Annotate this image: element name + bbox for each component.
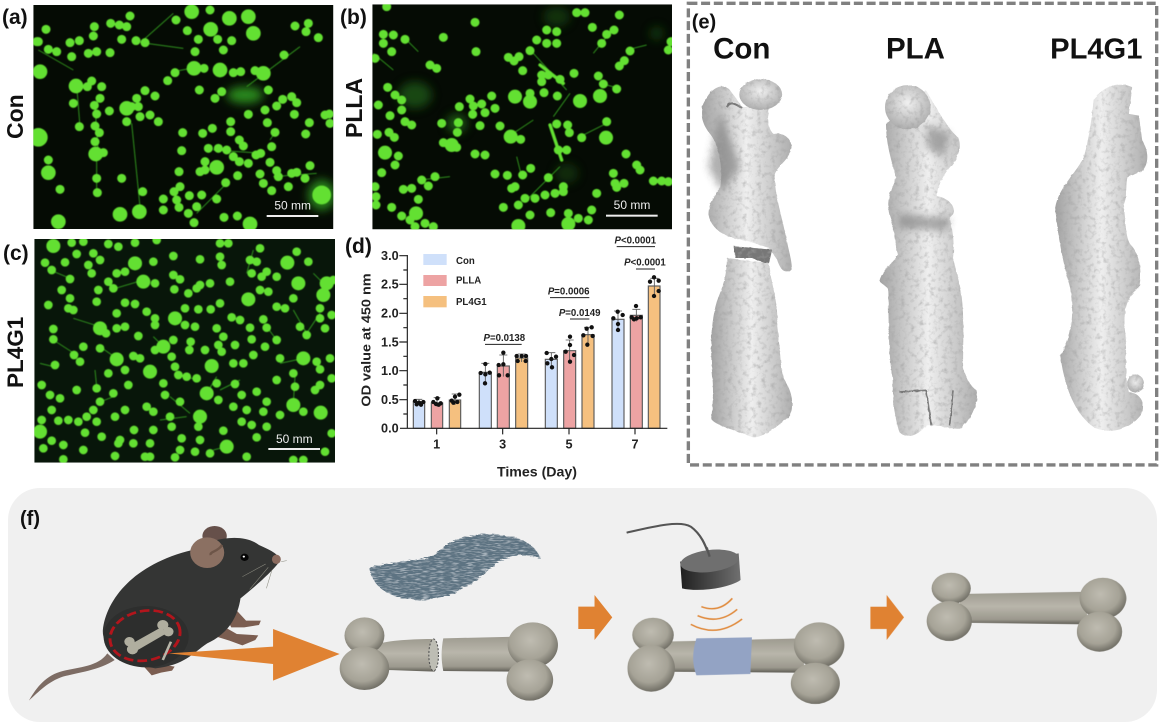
panel label d: (d)	[345, 235, 372, 258]
small femur in mouse	[124, 620, 174, 654]
orange arrow 2	[870, 595, 904, 640]
panel f: treatment schematic	[8, 488, 1157, 722]
y axis tick labels: 2.5	[381, 278, 399, 292]
fractured femur	[340, 617, 558, 701]
mouse back ear	[202, 526, 227, 546]
mouse haunch shading	[104, 606, 189, 667]
significance annotations: P<0.0001	[615, 235, 657, 246]
dashed frame	[688, 3, 1157, 465]
legend: PL4G1	[456, 297, 487, 308]
mouse eye	[240, 554, 249, 561]
y axis tick labels: 1.5	[381, 335, 399, 349]
heading Con: Con	[713, 33, 770, 66]
scale bar b	[606, 200, 658, 217]
panel b: PLLA fluorescence micrograph	[372, 4, 672, 229]
row label PL4G1: PL4G1	[3, 317, 28, 388]
data points	[415, 277, 659, 405]
y axis title: OD value at 450 nm	[359, 273, 373, 407]
mouse body	[103, 538, 280, 668]
panel label b: (b)	[340, 6, 367, 29]
panel c: PL4G1 fluorescence micrograph	[34, 239, 335, 463]
y axis tick labels	[381, 249, 399, 436]
bar chart d: OD value at 450 nm	[359, 235, 667, 480]
implant site ring	[104, 604, 186, 668]
femur: PL4G1	[1055, 84, 1147, 431]
scale bar a	[266, 201, 318, 217]
heading PLA: PLA	[886, 33, 945, 66]
mouse nose	[272, 555, 281, 564]
panel e: micro-CT femurs	[688, 3, 1157, 465]
significance annotations: P<0.0001	[624, 258, 666, 269]
panel label f: (f)	[20, 508, 40, 530]
mouse, implant and first arrow	[29, 526, 558, 701]
scale bar b: 50 mm	[614, 198, 650, 212]
healed femur	[927, 573, 1126, 652]
x axis tick labels	[433, 438, 639, 452]
axes	[399, 255, 667, 434]
x axis tick labels: 7	[631, 438, 639, 452]
x axis tick labels: 1	[433, 438, 440, 452]
ultrasound stage and healed femur	[578, 524, 1126, 704]
legend	[423, 254, 487, 308]
scale bar c: 50 mm	[276, 432, 313, 446]
large orange arrow	[168, 629, 340, 681]
femur: Con	[702, 79, 792, 437]
error bars	[416, 278, 658, 407]
scale bar a: 50 mm	[274, 198, 311, 212]
y axis tick labels: 3.0	[381, 249, 399, 263]
mouse whiskers	[242, 561, 287, 589]
small tibia in mouse	[163, 642, 171, 660]
row label Con: Con	[2, 94, 28, 139]
significance annotations: P=0.0006	[548, 286, 590, 297]
x axis tick labels: 3	[499, 438, 506, 452]
panel label a: (a)	[2, 6, 28, 29]
femur: PLA	[879, 85, 977, 436]
panel a: Con fluorescence micrograph	[33, 5, 335, 229]
ultrasound waves	[691, 598, 742, 630]
significance annotations	[484, 235, 666, 344]
mouse front ear	[190, 537, 224, 568]
x axis title: Times (Day)	[497, 465, 577, 480]
significance annotations: P=0.0149	[559, 308, 601, 319]
legend: Con	[456, 256, 475, 267]
y axis tick labels: 0.5	[381, 393, 399, 407]
y axis tick labels: 0.0	[381, 422, 399, 436]
row label PLLA: PLLA	[341, 78, 367, 138]
heading PL4G1: PL4G1	[1050, 34, 1142, 66]
mouse tail	[29, 653, 115, 701]
scale bar c	[268, 434, 320, 450]
significance annotations: P=0.0138	[484, 333, 526, 344]
legend: PLLA	[456, 275, 481, 286]
x axis tick labels: 5	[565, 438, 573, 452]
bars	[413, 286, 660, 428]
scaffold wrap	[693, 637, 752, 675]
y axis tick labels: 1.0	[381, 364, 399, 378]
y axis tick labels: 2.0	[381, 307, 399, 321]
panel label e: (e)	[692, 11, 716, 33]
wrapped femur	[627, 618, 844, 704]
orange arrow 1	[578, 595, 612, 640]
ultrasound transducer	[627, 524, 741, 590]
nanofiber scaffold	[369, 534, 540, 600]
mouse paws	[142, 607, 261, 675]
panel label c: (c)	[3, 242, 29, 265]
